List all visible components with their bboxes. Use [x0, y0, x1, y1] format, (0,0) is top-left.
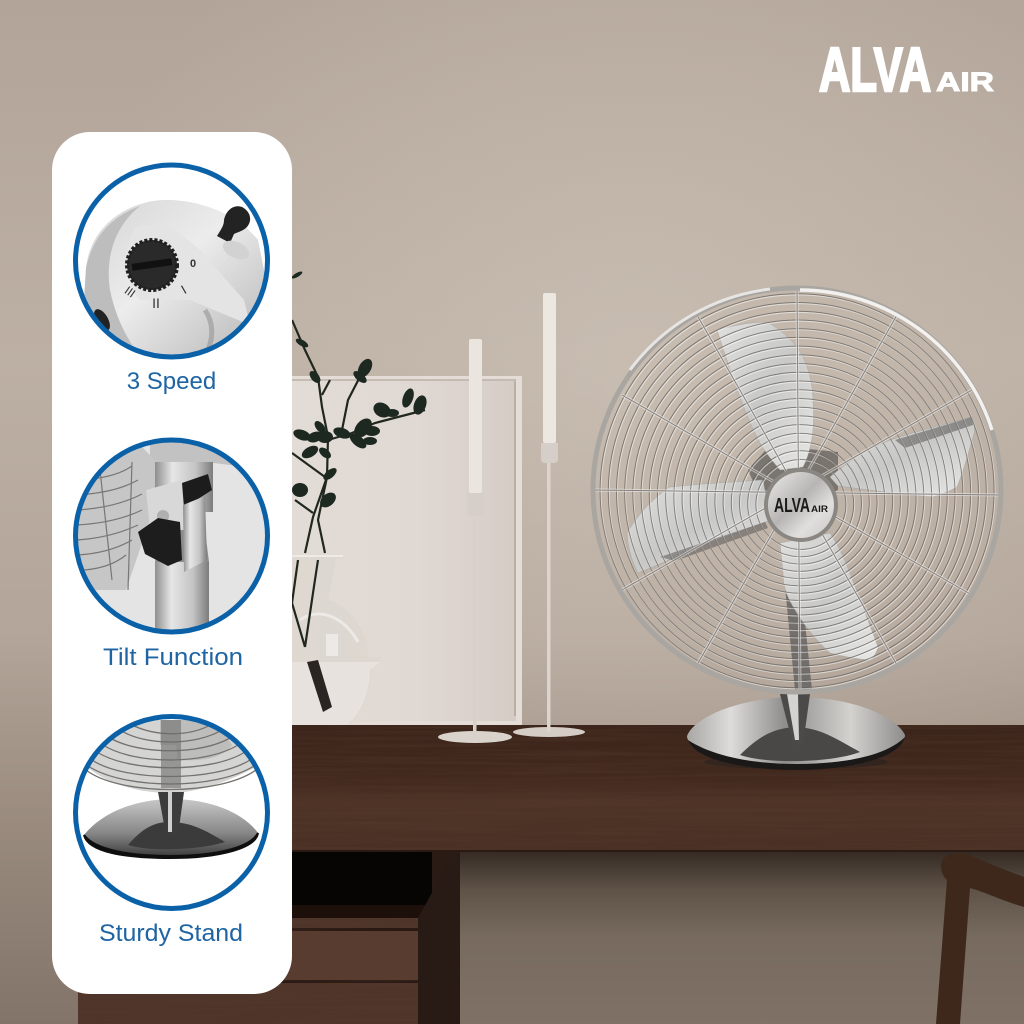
brand logo: AIR — [936, 67, 994, 97]
feature: sturdy stand — [70, 710, 274, 947]
feature: 3 speed — [70, 160, 274, 395]
icon: speed dial photo: II — [152, 295, 160, 311]
icon: speed dial photo: I — [178, 282, 189, 297]
label: 3 speed: 3 Speed — [127, 368, 216, 395]
desk drawer unit — [78, 852, 460, 1024]
fan: hub with logo: AIR — [811, 504, 828, 515]
icon: tilt joint photo — [70, 436, 274, 640]
icon: stand base photo — [70, 710, 274, 914]
desk top — [78, 725, 1024, 852]
icon: speed dial photo: 0 — [190, 258, 196, 270]
fan: wire grille — [593, 288, 1001, 692]
label: tilt function: Tilt Function — [103, 644, 243, 671]
vase — [292, 556, 382, 733]
plant: branches and leaves — [291, 270, 429, 647]
icon: speed dial photo — [70, 160, 274, 364]
fan: stand base — [687, 694, 905, 770]
fan: blades — [627, 322, 974, 660]
wall area under desk — [460, 852, 1024, 1024]
feature: tilt function — [70, 436, 274, 671]
candle holder: left — [438, 339, 512, 743]
label: sturdy stand: Sturdy Stand — [99, 920, 243, 947]
chair — [936, 853, 1024, 1024]
brand logo: ALVA — [819, 36, 931, 105]
fan: hub with logo — [764, 468, 838, 542]
icon: speed dial photo: III — [122, 283, 138, 301]
fan: blade shadows — [660, 417, 973, 561]
panel: features — [52, 132, 292, 994]
candle holder: right — [513, 293, 585, 737]
fan: hub with logo: ALVA — [774, 495, 810, 517]
picture frame — [292, 376, 522, 725]
fan: motor and rear post — [748, 445, 838, 690]
